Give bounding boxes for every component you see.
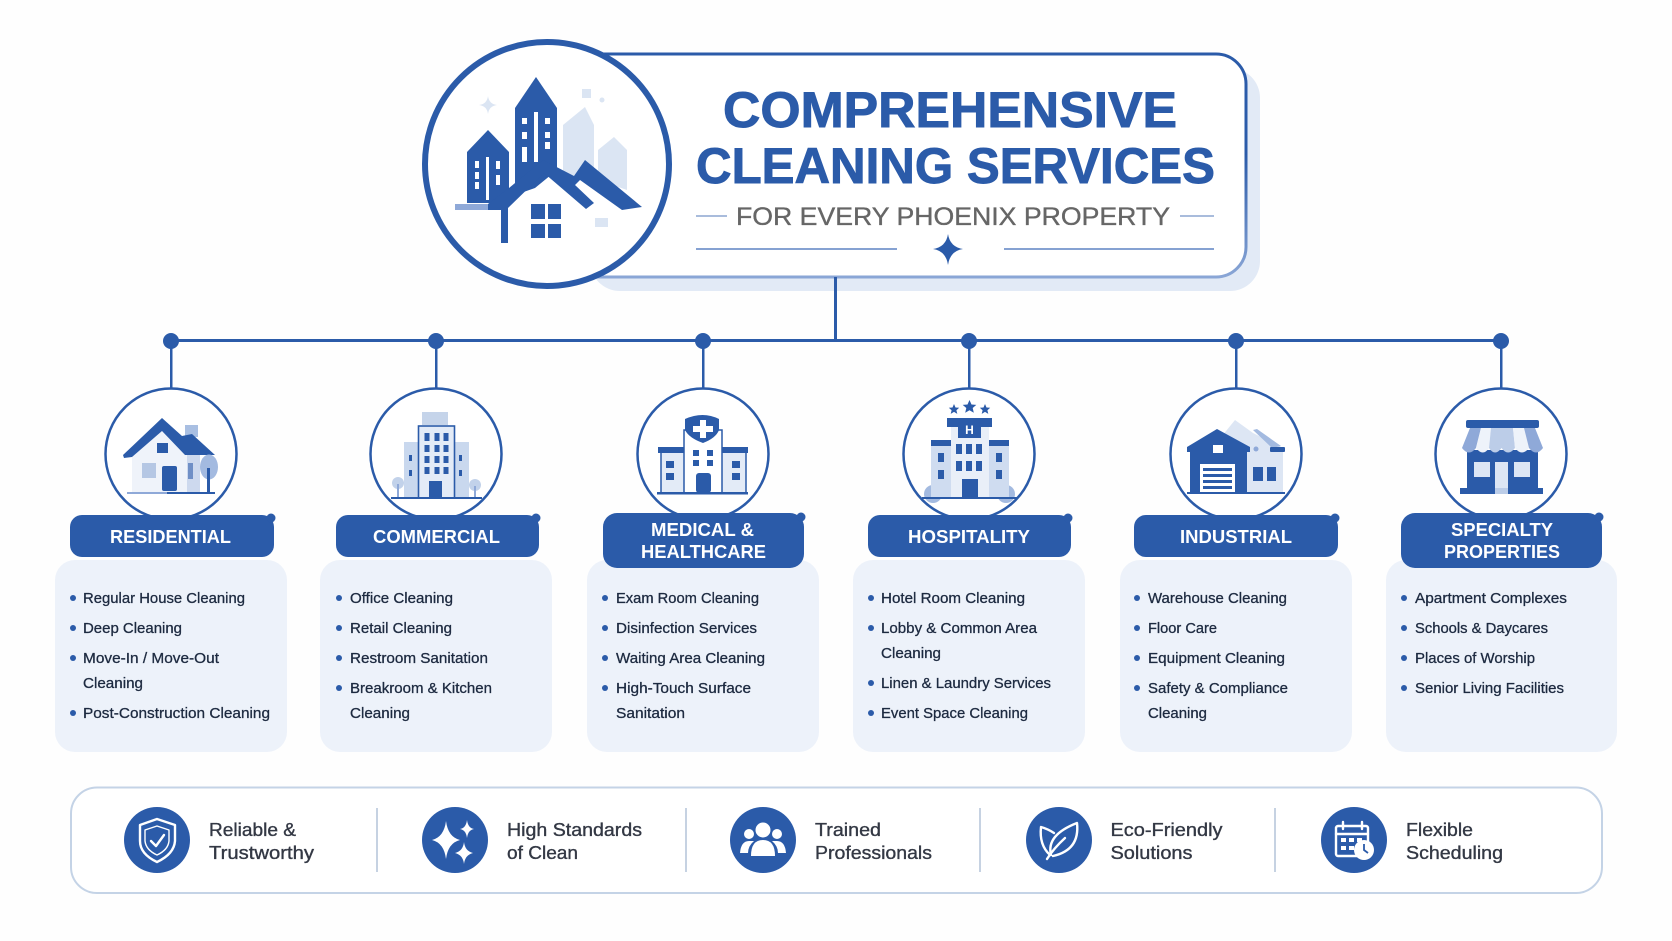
service list: Cleaning xyxy=(1148,705,1207,722)
service list xyxy=(602,590,765,722)
service list xyxy=(336,590,492,722)
service list: Apartment Complexes xyxy=(1415,590,1567,607)
title banner xyxy=(570,54,1260,291)
category label: SPECIALTY xyxy=(1451,519,1554,540)
title: CLEANING SERVICES xyxy=(696,138,1215,194)
list card xyxy=(55,560,287,752)
service list: Senior Living Facilities xyxy=(1415,680,1564,697)
list card xyxy=(1386,560,1617,752)
service list xyxy=(1134,590,1288,722)
benefit: eco friendly: Eco-Friendly xyxy=(1110,820,1222,840)
title xyxy=(696,82,1215,194)
category label xyxy=(1134,514,1340,557)
column: residential xyxy=(55,388,287,752)
icon circle: hotel xyxy=(904,388,1034,520)
service list: Breakroom & Kitchen xyxy=(350,680,492,697)
benefit: reliable xyxy=(124,807,314,873)
category label: INDUSTRIAL xyxy=(1180,526,1292,547)
service list: Warehouse Cleaning xyxy=(1148,590,1287,607)
column: industrial xyxy=(1120,388,1352,752)
category label: PROPERTIES xyxy=(1444,541,1560,562)
category label: MEDICAL & xyxy=(651,519,754,540)
service list: Hotel Room Cleaning xyxy=(881,590,1025,607)
benefit: reliable: Reliable & xyxy=(209,820,296,840)
service list: Cleaning xyxy=(83,675,143,692)
category label xyxy=(603,512,806,568)
benefit: high standards xyxy=(422,807,642,873)
service list: Office Cleaning xyxy=(350,590,453,607)
service list xyxy=(1401,590,1567,697)
service list: Lobby & Common Area xyxy=(881,620,1038,637)
service list xyxy=(868,590,1051,722)
banner shadow xyxy=(590,68,1260,291)
footer benefits bar xyxy=(71,788,1602,893)
service list: Equipment Cleaning xyxy=(1148,650,1285,667)
title: COMPREHENSIVE xyxy=(723,82,1177,138)
category label: HOSPITALITY xyxy=(908,526,1031,547)
category label: COMMERCIAL xyxy=(373,526,500,547)
service list: Waiting Area Cleaning xyxy=(616,650,765,667)
benefit: trained professionals: Trained xyxy=(815,820,881,840)
icon circle: storefront xyxy=(1436,388,1566,520)
sparkle divider xyxy=(696,234,1214,265)
category label xyxy=(868,514,1072,557)
service list: Restroom Sanitation xyxy=(350,650,488,667)
service list: Regular House Cleaning xyxy=(83,590,245,607)
service list: Retail Cleaning xyxy=(350,620,452,637)
service list: Sanitation xyxy=(616,705,685,722)
column: hospitality xyxy=(853,388,1085,752)
category label: HEALTHCARE xyxy=(641,541,766,562)
benefit: flexible scheduling: Flexible xyxy=(1406,820,1473,840)
service list: Cleaning xyxy=(350,705,410,722)
service list: Disinfection Services xyxy=(616,620,757,637)
service list: Exam Room Cleaning xyxy=(616,590,759,607)
house roof xyxy=(455,160,642,243)
benefit: trained professionals: Professionals xyxy=(815,843,932,863)
service list: Post-Construction Cleaning xyxy=(83,705,270,722)
benefit: high standards: of Clean xyxy=(507,843,578,863)
column: commercial xyxy=(320,388,552,752)
list card xyxy=(1120,560,1352,752)
benefit: eco friendly: Solutions xyxy=(1110,843,1192,863)
banner panel xyxy=(570,54,1246,277)
service list: Linen & Laundry Services xyxy=(881,675,1051,692)
benefit: flexible scheduling: Scheduling xyxy=(1406,843,1503,863)
benefit: flexible scheduling xyxy=(1321,807,1503,873)
small tower xyxy=(467,130,509,203)
category label: RESIDENTIAL xyxy=(110,526,231,547)
service list: Places of Worship xyxy=(1415,650,1535,667)
benefit: reliable: Trustworthy xyxy=(209,843,314,863)
service list: Event Space Cleaning xyxy=(881,705,1028,722)
house window xyxy=(531,204,561,238)
category label xyxy=(336,514,540,557)
logo circle with city and house xyxy=(425,42,669,286)
icon circle: warehouse xyxy=(1170,388,1302,520)
service list: Deep Cleaning xyxy=(83,620,182,637)
column: medical and healthcare xyxy=(587,388,819,752)
tall tower xyxy=(515,77,557,195)
service list: Safety & Compliance xyxy=(1148,680,1288,697)
benefit: trained professionals xyxy=(730,807,932,873)
service list: Schools & Daycares xyxy=(1415,620,1548,637)
service list: Cleaning xyxy=(881,645,941,662)
column: specialty properties xyxy=(1386,388,1617,752)
footer panel xyxy=(71,788,1602,893)
subtitle: FOR EVERY PHOENIX PROPERTY xyxy=(736,203,1170,231)
icon circle: hotel: H xyxy=(965,423,974,437)
icon circle: office tower xyxy=(370,388,502,520)
list card xyxy=(853,560,1085,752)
category label xyxy=(70,514,276,557)
category label xyxy=(1401,512,1604,568)
benefit: high standards: High Standards xyxy=(507,820,642,840)
pale background buildings xyxy=(479,89,627,227)
list card xyxy=(587,560,819,752)
service list: Floor Care xyxy=(1148,620,1217,637)
benefit: eco friendly xyxy=(1026,807,1222,873)
service list: High-Touch Surface xyxy=(616,680,751,697)
list card xyxy=(320,560,552,752)
service list: Move-In / Move-Out xyxy=(83,650,220,667)
icon circle: hospital xyxy=(638,388,768,520)
service list xyxy=(70,590,270,722)
connector tree xyxy=(163,277,1509,388)
icon circle: house xyxy=(106,388,236,520)
